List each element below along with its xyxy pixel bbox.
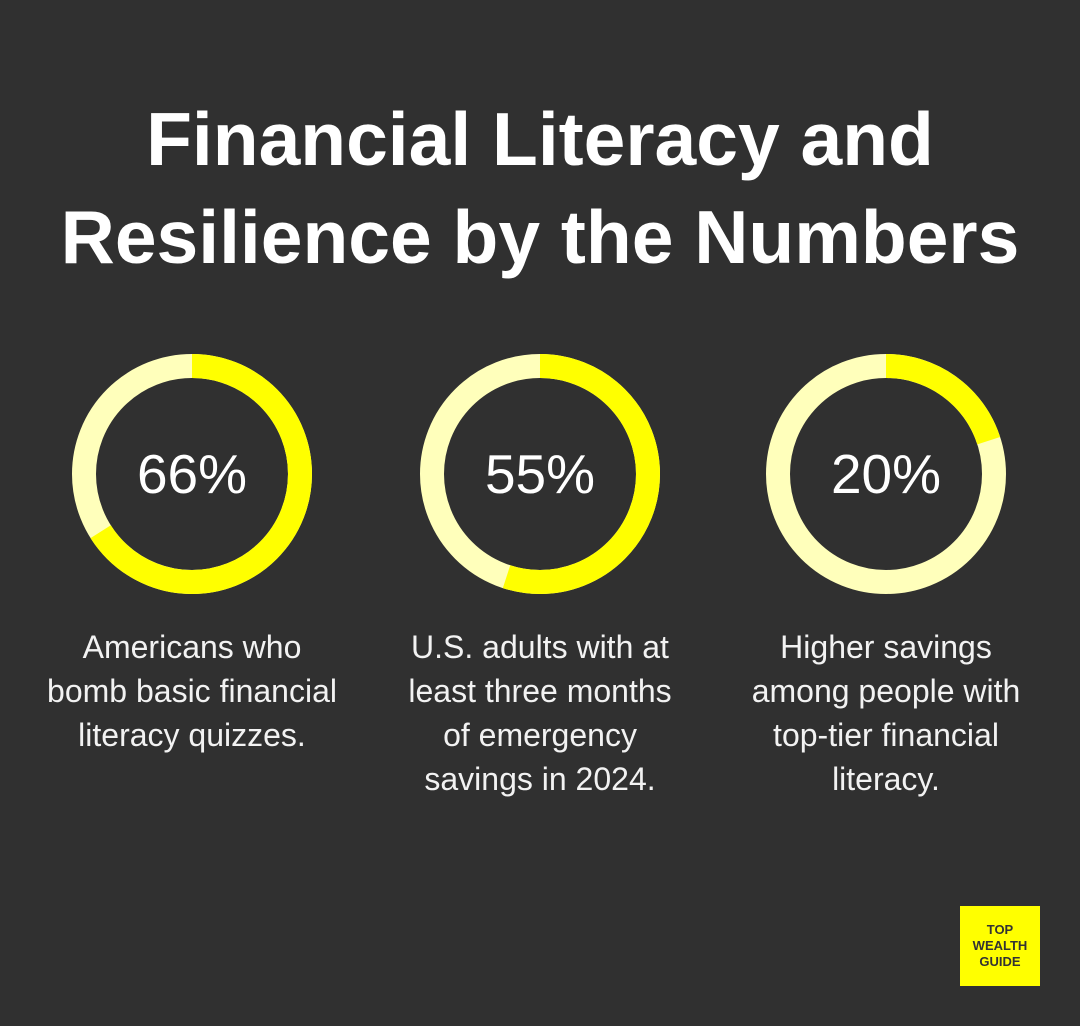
label: 55%	[408, 629, 672, 797]
label: 66%: Americans who	[83, 629, 301, 665]
logo: TOP	[987, 922, 1013, 937]
label: 55%: of emergency	[443, 717, 637, 753]
label: 66%	[47, 629, 337, 753]
label: 66%: literacy quizzes.	[78, 717, 306, 753]
label: 20%: top-tier financial	[773, 717, 999, 753]
label: 20%: literacy.	[832, 761, 940, 797]
ring: 20%: 20%	[831, 443, 941, 505]
ring: 66%	[72, 354, 312, 594]
label: 55%: U.S. adults with at	[411, 629, 669, 665]
logo	[960, 906, 1040, 986]
label: 20%: Higher savings	[780, 629, 992, 665]
logo: GUIDE	[979, 954, 1021, 969]
ring: 66%: 66%	[137, 443, 247, 505]
title: Financial Literacy and	[146, 97, 934, 181]
label: 55%: least three months	[408, 673, 672, 709]
ring: 55%	[420, 354, 660, 594]
label: 20%	[752, 629, 1020, 797]
title: Resilience by the Numbers	[61, 195, 1019, 279]
label: 55%: savings in 2024.	[424, 761, 656, 797]
label: 20%: among people with	[752, 673, 1020, 709]
ring: 20%	[766, 354, 1006, 594]
ring: 55%: 55%	[485, 443, 595, 505]
label: 66%: bomb basic financial	[47, 673, 337, 709]
title	[61, 97, 1019, 279]
logo: WEALTH	[973, 938, 1027, 953]
